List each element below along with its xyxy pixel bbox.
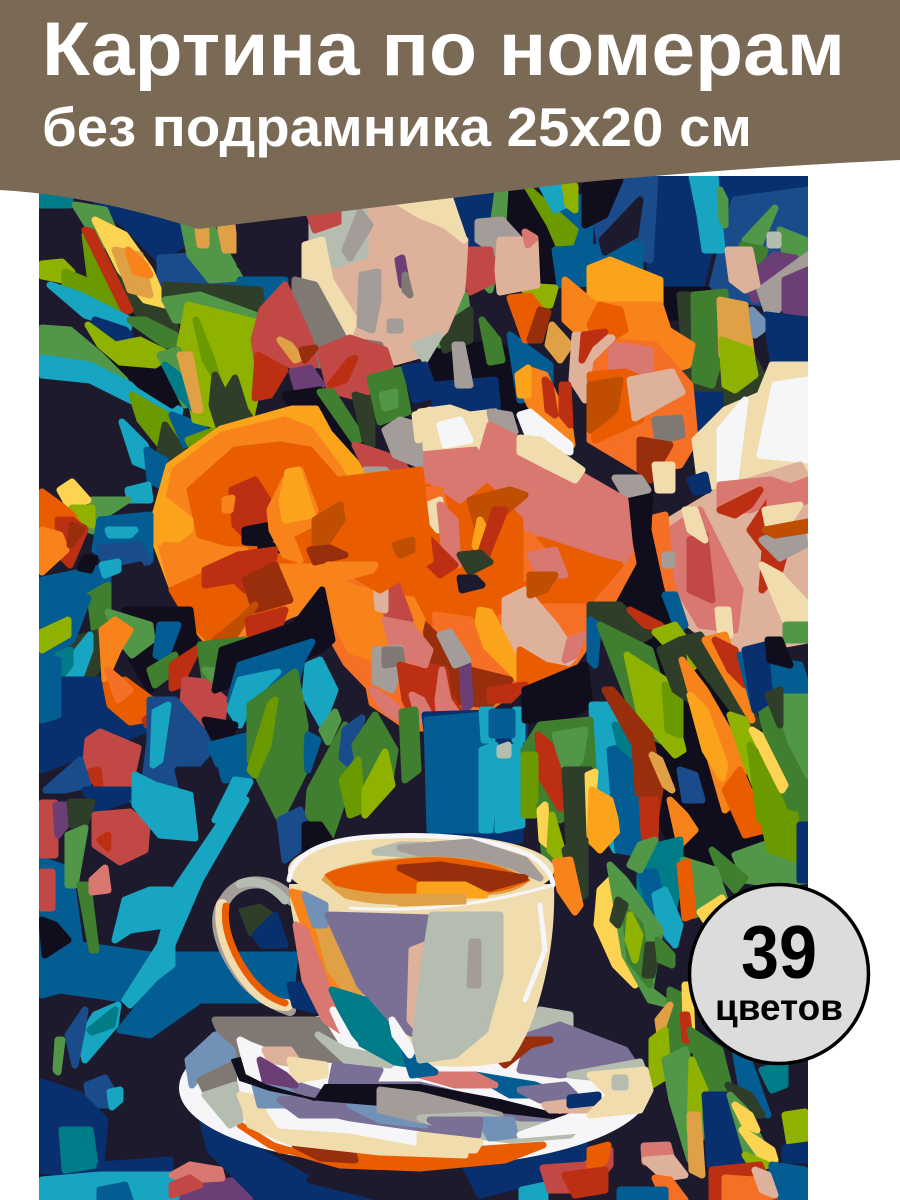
painting: cup and flowers: [36, 176, 808, 1200]
orange left flower bud at edge: [42, 482, 128, 572]
orange flower, upper right: [518, 260, 695, 480]
hanging leaf, right of cup: [597, 865, 672, 1005]
title line 1: Картина по номерам: [42, 7, 845, 92]
big centre flower: [322, 408, 633, 730]
badge: colour count: [690, 884, 868, 1064]
badge number: 39: [741, 910, 817, 994]
cream and salmon flower, right: [645, 365, 808, 660]
cup handle: [218, 882, 315, 1010]
brown title banner: [0, 0, 900, 229]
green leaves and vase: [250, 672, 525, 860]
foliage, right: [524, 605, 808, 945]
foliage, lower right: [465, 985, 808, 1200]
red flower, top: [254, 280, 435, 452]
foliage, lower left: [39, 772, 376, 1200]
foliage, top centre and right: [420, 176, 808, 435]
peach flower, top: [305, 199, 465, 362]
dark gap and small petals: [610, 465, 708, 630]
foliage, top left: [39, 194, 288, 504]
badge caption: цветов: [715, 987, 843, 1028]
big orange flower, left: [151, 409, 430, 647]
foliage, middle left: [42, 515, 335, 820]
cup rim and coffee: [289, 835, 553, 909]
saucer: [180, 1010, 650, 1168]
cup body: [290, 885, 553, 1075]
title line 2: без подрамника 25х20 см: [42, 96, 752, 158]
